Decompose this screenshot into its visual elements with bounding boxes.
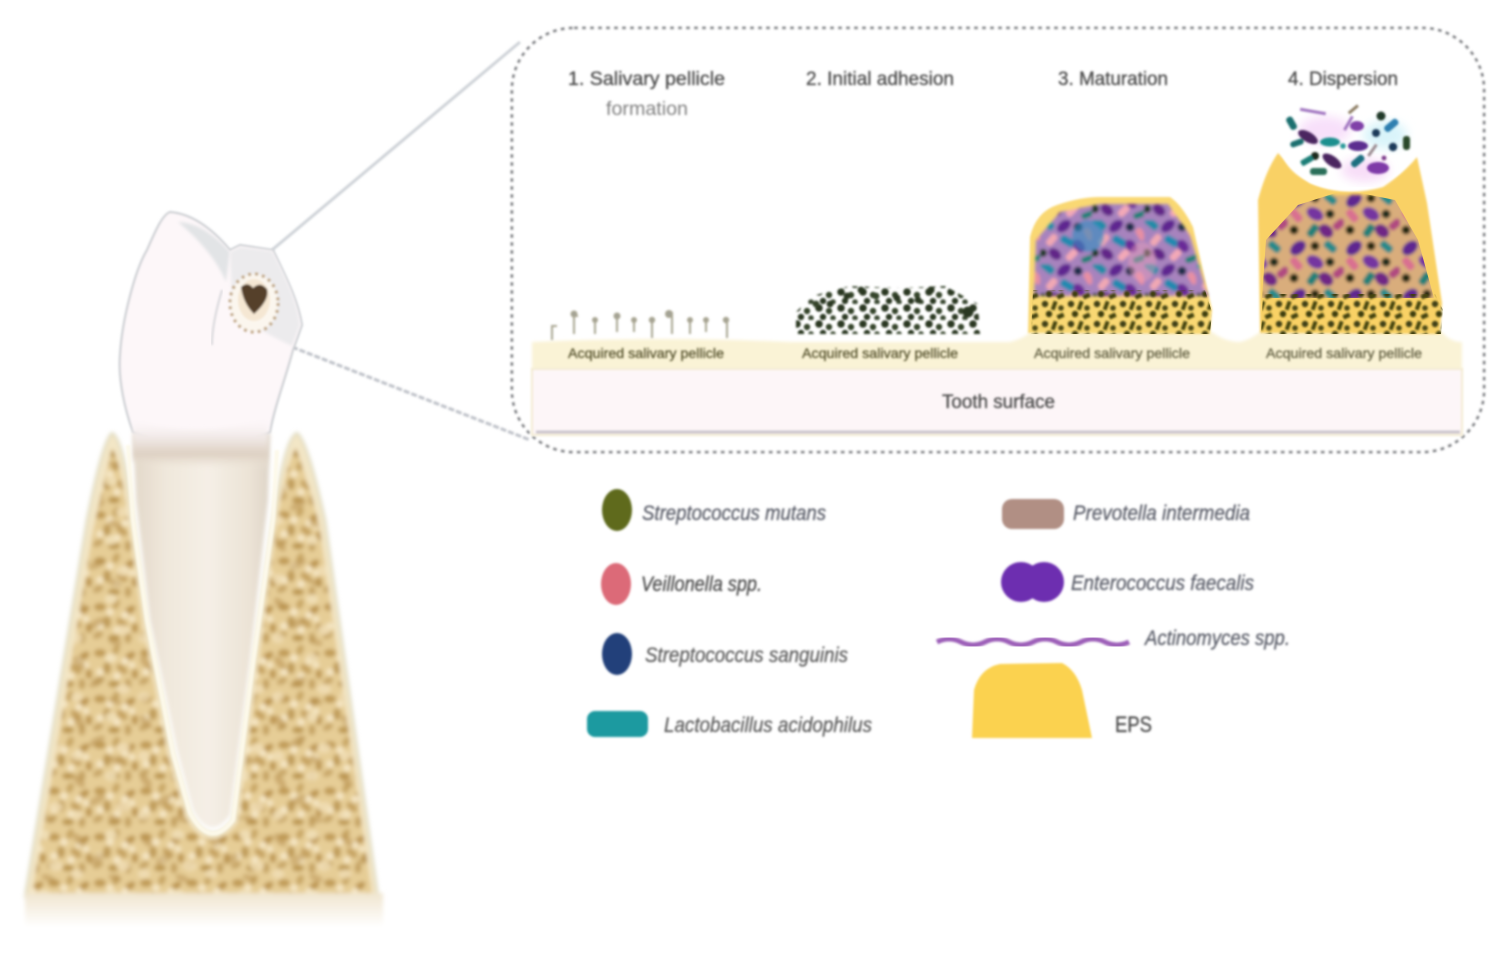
legend: Lactobacillus acidophilus	[587, 711, 872, 737]
stage 1 heading: 1. Salivary pellicle	[568, 69, 725, 90]
legend: EPS: EPS	[1115, 712, 1152, 737]
legend: Streptococcus sanguinis	[602, 633, 848, 675]
tooth surface label: Tooth surface	[942, 392, 1055, 413]
legend: Enterococcus faecalis	[1001, 562, 1254, 602]
dispersed bacteria cloud	[1281, 102, 1413, 190]
EPS matrix stage 3	[1028, 197, 1212, 334]
early colonizers stage 4	[1261, 294, 1443, 334]
pellicle labels: Acquired salivary pellicle	[1034, 345, 1190, 361]
caries lesion	[230, 274, 278, 332]
legend: Enterococcus faecalis: Enterococcus faecalis	[1071, 572, 1254, 595]
tooth surface layer	[532, 369, 1462, 435]
pellicle labels	[568, 345, 1422, 361]
legend: Streptococcus sanguinis: Streptococcus sanguinis	[645, 644, 848, 667]
stage 3 heading: 3. Maturation	[1058, 69, 1168, 90]
stage 4 heading: 4. Dispersion	[1288, 69, 1398, 90]
stage 1 heading	[568, 69, 725, 120]
stage 1 heading: formation	[606, 99, 688, 120]
legend: Streptococcus mutans: Streptococcus mutans	[642, 502, 826, 525]
tooth	[120, 212, 302, 833]
legend: Veillonella spp.	[601, 563, 762, 605]
tooth root	[133, 433, 270, 827]
legend	[587, 489, 1290, 738]
legend: Actinomyces spp.	[937, 627, 1290, 650]
EPS matrix stage 4	[1258, 153, 1442, 334]
legend: Streptococcus mutans	[602, 489, 826, 531]
crown neck shading	[133, 418, 268, 470]
stage 4 dispersion biofilm	[1258, 102, 1444, 336]
periodontal ligament line	[128, 445, 277, 833]
mixed bacteria stage 3	[1030, 200, 1212, 296]
legend: Veillonella spp.: Veillonella spp.	[641, 573, 762, 596]
callout lines from tooth to zoom panel	[272, 42, 530, 440]
fissure line	[212, 290, 222, 345]
legend: Actinomyces spp.: Actinomyces spp.	[1143, 627, 1290, 650]
stage 1 pellicle proteins	[552, 311, 728, 340]
stage 2 initial adhesion bacteria	[796, 284, 980, 334]
crown occlusal shading	[178, 222, 230, 282]
alveolar bone	[25, 433, 383, 927]
legend: Lactobacillus acidophilus: Lactobacillus acidophilus	[664, 714, 872, 737]
early colonizers stage 3	[1031, 290, 1212, 334]
pellicle labels: Acquired salivary pellicle	[1266, 345, 1422, 361]
tooth crown	[120, 212, 302, 447]
legend: Prevotella intermedia	[1002, 499, 1250, 529]
pellicle labels: Acquired salivary pellicle	[568, 345, 724, 361]
legend: EPS	[972, 663, 1152, 738]
pellicle labels: Acquired salivary pellicle	[802, 345, 958, 361]
legend: Prevotella intermedia: Prevotella intermedia	[1073, 502, 1250, 525]
mixed bacteria stage 4	[1262, 195, 1434, 299]
dashed panel outline	[512, 28, 1484, 452]
stage 2 heading: 2. Initial adhesion	[806, 69, 954, 90]
panel: biofilm stages	[512, 28, 1484, 452]
acquired salivary pellicle layer	[532, 332, 1462, 370]
stage 3 maturation biofilm	[1028, 197, 1214, 336]
